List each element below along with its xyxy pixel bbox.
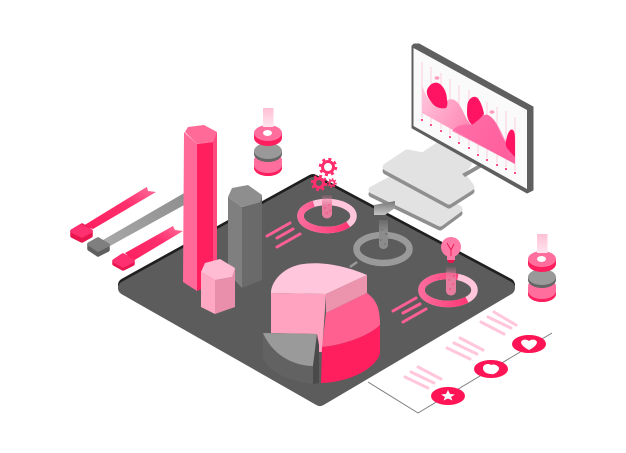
chart gridlines xyxy=(422,62,515,171)
light bulb icon xyxy=(441,237,461,263)
chart area: mid xyxy=(452,115,515,164)
monitor screen xyxy=(414,48,527,189)
legend lines xyxy=(393,298,426,322)
badge: heart xyxy=(512,335,546,353)
gray column xyxy=(228,185,262,288)
chart peaks xyxy=(427,83,515,157)
monitor with area chart xyxy=(412,44,533,193)
chart area: light xyxy=(422,85,515,164)
legend lines xyxy=(267,223,300,247)
ring metric: gears xyxy=(267,159,354,247)
badge: star xyxy=(431,387,465,405)
chart highlights xyxy=(434,76,494,114)
pie slice: pink top xyxy=(322,293,380,347)
monitor frame xyxy=(412,44,533,193)
timeline connector xyxy=(368,333,552,413)
pie slice: gray side xyxy=(263,333,313,384)
pie slice: shadow xyxy=(313,334,319,384)
gray ribbon xyxy=(89,192,186,255)
caption lines: heart xyxy=(481,312,516,334)
test tube xyxy=(446,267,456,296)
pink ribbon 1 xyxy=(72,187,156,241)
small connector xyxy=(350,262,357,267)
pie slice: red side xyxy=(321,325,380,383)
small pale pink column xyxy=(201,259,235,314)
test tube xyxy=(379,220,388,249)
stack icon: top centre xyxy=(254,108,282,176)
ring chart xyxy=(300,202,354,230)
gears icon xyxy=(312,159,336,190)
lower slab xyxy=(372,176,459,227)
ring chart xyxy=(422,276,474,304)
upper slab xyxy=(386,146,471,205)
ribbon bars xyxy=(72,187,186,269)
chart markers xyxy=(421,119,516,174)
pie slice: pale top xyxy=(271,263,367,294)
ring metric: gray xyxy=(356,201,410,263)
pink ribbon 2 xyxy=(114,226,183,269)
stand arm xyxy=(462,165,482,177)
caption lines: star xyxy=(405,367,441,388)
ring chart xyxy=(356,235,410,263)
pie slice: pale front xyxy=(271,293,326,352)
caption lines: message xyxy=(447,338,483,359)
caption lines xyxy=(405,312,516,388)
pie slice: gray top xyxy=(263,333,317,366)
stack icon: right xyxy=(528,234,556,302)
pie slice: pale edge xyxy=(326,275,367,313)
badge: message xyxy=(474,360,508,378)
pie chart xyxy=(263,263,380,384)
ring metric: idea xyxy=(393,237,474,322)
monitor stand slabs xyxy=(372,146,482,227)
panel: dark board xyxy=(125,181,508,399)
tall pink column xyxy=(183,125,217,291)
test tube xyxy=(322,195,332,218)
funnel xyxy=(374,201,395,215)
